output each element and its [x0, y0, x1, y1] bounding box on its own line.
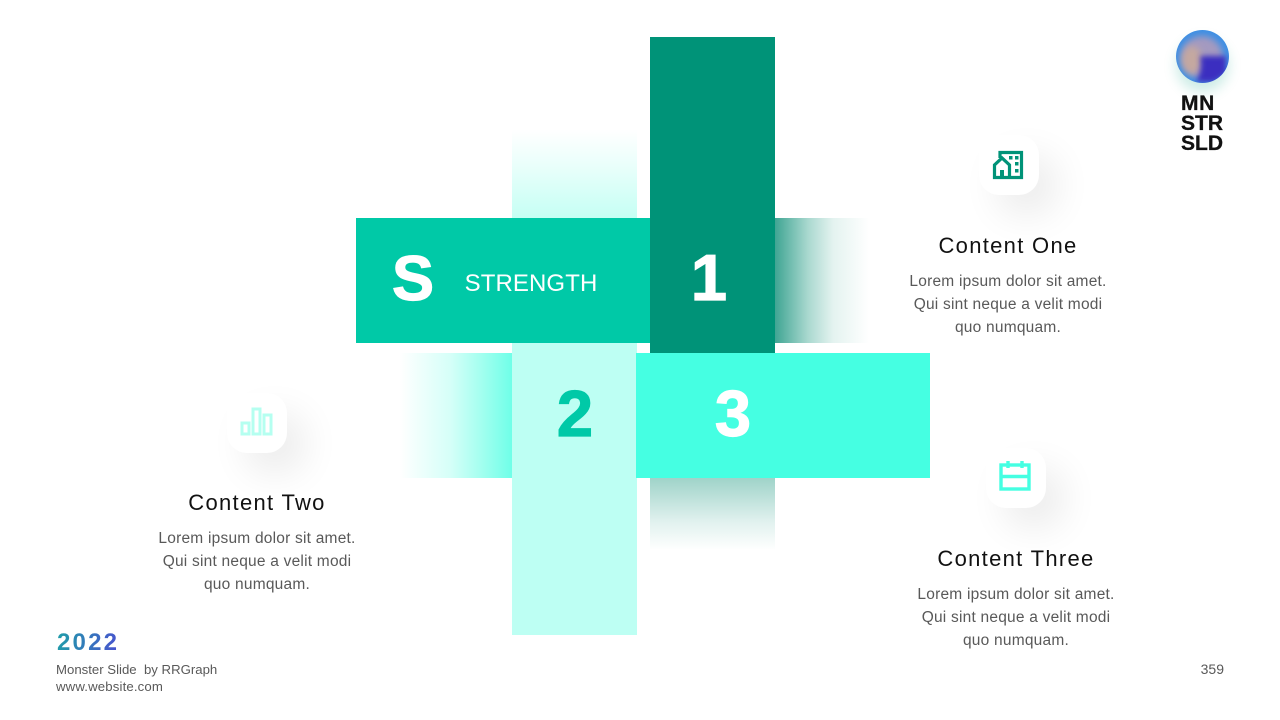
light column [512, 343, 637, 635]
logo orb [1176, 30, 1229, 83]
label: strength: STRENGTH [465, 270, 597, 297]
logo text: STR [1181, 112, 1223, 135]
fade band: right of green bar [775, 218, 869, 343]
icon card: buildings [979, 135, 1039, 195]
page number: 359 [1201, 661, 1224, 677]
fade band: top of light column [512, 130, 637, 218]
body: content three: quo numquam. [963, 632, 1069, 649]
text block: content one [909, 233, 1107, 336]
footer credit: Monster Slide by RRGraph [56, 662, 217, 677]
body: content two: Lorem ipsum dolor sit amet. [158, 530, 356, 547]
number 3: 3 [715, 377, 751, 450]
body: content two: quo numquam. [204, 576, 310, 593]
cyan bar [636, 353, 930, 478]
fade band: left of cyan bar [400, 353, 512, 478]
logo text [1181, 92, 1223, 155]
heading: content one: Content One [938, 233, 1078, 258]
body: content one: Lorem ipsum dolor sit amet. [909, 273, 1107, 290]
icon card: calendar [986, 448, 1046, 508]
icon: buildings [992, 150, 1024, 180]
body: content one [909, 273, 1107, 336]
logo text: SLD [1181, 132, 1223, 155]
dark column [650, 37, 775, 353]
text block: content three [917, 546, 1115, 649]
icon: calendar [999, 461, 1031, 491]
logo text: MN [1181, 92, 1215, 115]
heading: content three: Content Three [937, 546, 1095, 571]
body: content two: Qui sint neque a velit modi [163, 553, 351, 570]
body: content two [158, 530, 356, 593]
body: content one: Qui sint neque a velit modi [914, 296, 1102, 313]
body: content three [917, 586, 1115, 649]
text block: content two [158, 490, 356, 593]
heading: content two: Content Two [188, 490, 326, 515]
icon card: bar chart [227, 393, 287, 453]
body: content three: Lorem ipsum dolor sit amet. [917, 586, 1115, 603]
number 2: 2 [557, 377, 593, 450]
icon: bar chart [240, 408, 272, 436]
body: content one: quo numquam. [955, 319, 1061, 336]
year: 2022 [57, 629, 119, 656]
body: content three: Qui sint neque a velit modi [922, 609, 1110, 626]
footer credit [56, 662, 217, 694]
letter S: S [392, 244, 434, 314]
footer credit: www.website.com [56, 679, 163, 694]
number 1: 1 [691, 241, 727, 314]
green bar [356, 218, 650, 343]
fade band: below dark column [650, 478, 775, 550]
